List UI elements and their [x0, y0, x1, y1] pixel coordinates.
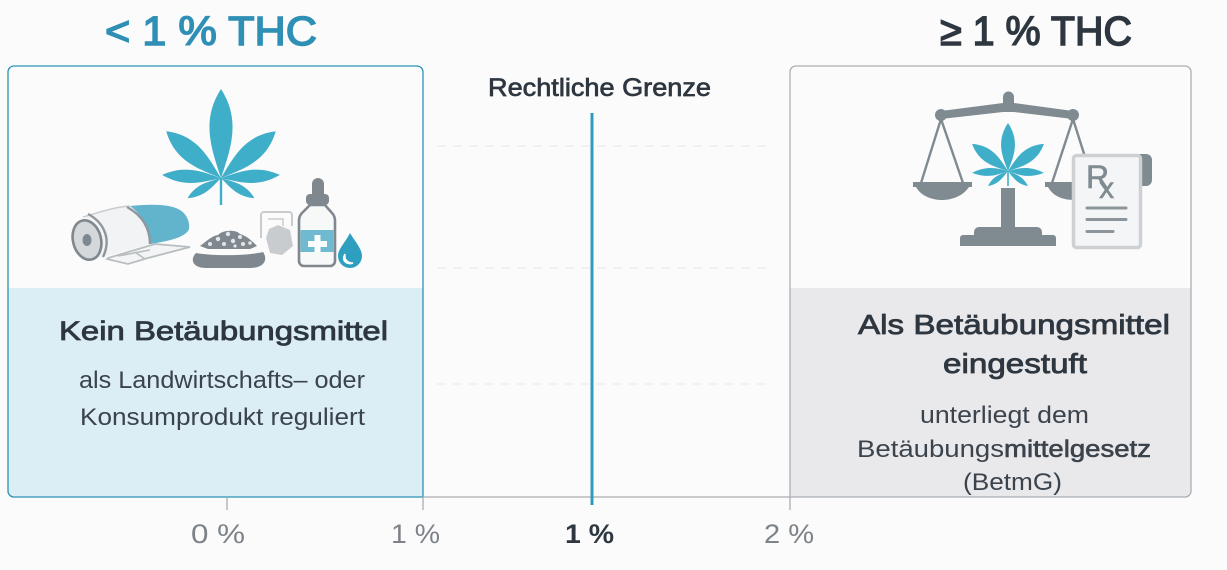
- icon: hemp leaf: [160, 89, 282, 205]
- text: regulated as agricultural or consumer product: als Landwirtschafts– oder: [79, 367, 365, 394]
- threshold line: [590, 113, 594, 505]
- axis label 2 percent: 2 %: [764, 519, 814, 549]
- icon: prescription document: [1074, 154, 1152, 248]
- icon: bowl of seeds: [193, 231, 265, 268]
- axis label 1 percent threshold: 1 %: [565, 519, 614, 549]
- icon: rolled textile: [69, 205, 190, 264]
- heading: classified as narcotic: eingestuft: [943, 348, 1087, 379]
- panel: below 1 percent: [8, 66, 423, 497]
- label: Rx symbol: R: [1086, 159, 1109, 195]
- axis label 1 percent: 1 %: [391, 519, 440, 549]
- text: regulated as agricultural or consumer product: Konsumprodukt reguliert: [80, 404, 365, 431]
- label: legal limit: Rechtliche Grenze: [488, 74, 711, 102]
- icon: water drop: [338, 233, 362, 268]
- icon: small hemp leaf: [968, 123, 1048, 188]
- text: regulated as agricultural or consumer product: [79, 367, 365, 431]
- panel: at or above 1 percent: [790, 66, 1191, 497]
- icon: oil bottle: [299, 178, 335, 266]
- icon: small seed packet: [261, 212, 293, 255]
- icon: scales of justice with leaf: [913, 92, 1086, 246]
- heading: classified as narcotic: Als Betäubungsmittel: [858, 309, 1170, 340]
- left heading: < 1 % THC: [105, 8, 317, 54]
- text: subject to the narcotics act: Betäubungs mittelgesetz: [857, 436, 1151, 463]
- text: subject to the narcotics act: (BetmG): [963, 469, 1062, 496]
- axis label 0 percent: 0 %: [191, 519, 245, 549]
- right heading: ≥ 1 % THC: [940, 8, 1132, 54]
- label: Rx symbol: x: [1099, 172, 1114, 205]
- heading: no narcotic: Kein Betäubungsmittel: [59, 316, 388, 346]
- text: subject to the narcotics act: unterliegt dem: [920, 402, 1089, 429]
- axis line with ticks: [227, 497, 790, 510]
- text: subject to the narcotics act: [857, 402, 1151, 496]
- heading: classified as narcotic: [858, 309, 1170, 379]
